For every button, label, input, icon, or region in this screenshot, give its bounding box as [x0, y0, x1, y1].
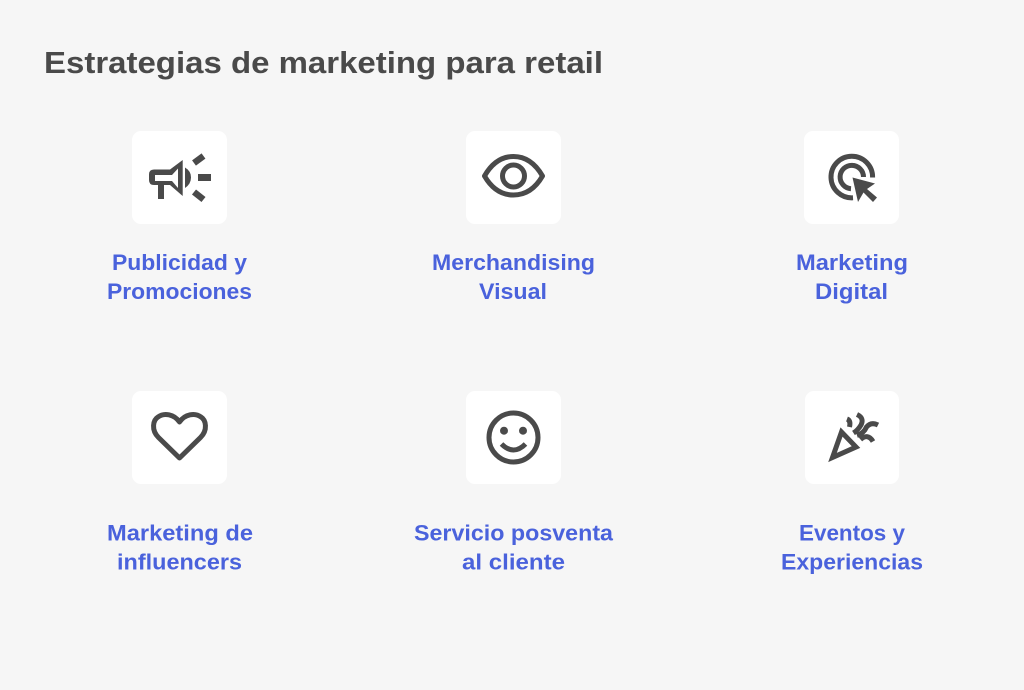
title: Estrategias de marketing para retail — [44, 45, 603, 80]
label: Servicio posventa al cliente: al cliente — [462, 550, 565, 574]
label: Eventos y Experiencias: Eventos y — [799, 520, 906, 546]
icon: megaphone — [149, 156, 211, 200]
card: eye — [466, 131, 561, 224]
label: Publicidad y Promociones: Publicidad y — [112, 250, 248, 275]
panel: Publicidad y Promociones — [107, 131, 252, 304]
icon: eye — [484, 156, 542, 195]
panel: Eventos y Experiencias — [781, 391, 923, 574]
label: Merchandising Visual — [432, 250, 595, 304]
panel: Marketing de influencers — [107, 391, 253, 574]
label: Eventos y Experiencias: Experiencias — [781, 550, 923, 574]
card: party popper — [805, 391, 899, 484]
label: Marketing Digital: Marketing — [796, 250, 908, 275]
card: megaphone — [132, 131, 227, 224]
label: Marketing de influencers — [107, 520, 253, 574]
panel: Merchandising Visual — [432, 131, 595, 304]
label: Marketing Digital — [796, 250, 908, 304]
panel: Servicio posventa al cliente — [414, 391, 614, 574]
panel: Marketing Digital — [796, 131, 908, 304]
icon: target with cursor — [831, 156, 877, 202]
label: Servicio posventa al cliente: Servicio posventa — [414, 520, 614, 546]
label: Merchandising Visual: Merchandising — [432, 250, 595, 275]
label: Marketing Digital: Digital — [815, 279, 888, 304]
label: Merchandising Visual: Visual — [479, 279, 547, 304]
label: Publicidad y Promociones: Promociones — [107, 279, 252, 304]
card: heart — [132, 391, 227, 484]
card: smile — [466, 391, 561, 484]
icon: smiley face — [489, 413, 538, 462]
label: Marketing de influencers: influencers — [117, 550, 242, 574]
icon: heart — [154, 414, 205, 458]
card: target — [804, 131, 899, 224]
icon: party popper — [832, 414, 878, 458]
label: Publicidad y Promociones — [107, 250, 252, 304]
label: Eventos y Experiencias — [781, 520, 923, 574]
label: Servicio posventa al cliente — [414, 520, 614, 574]
label: Marketing de influencers: Marketing de — [107, 520, 253, 546]
